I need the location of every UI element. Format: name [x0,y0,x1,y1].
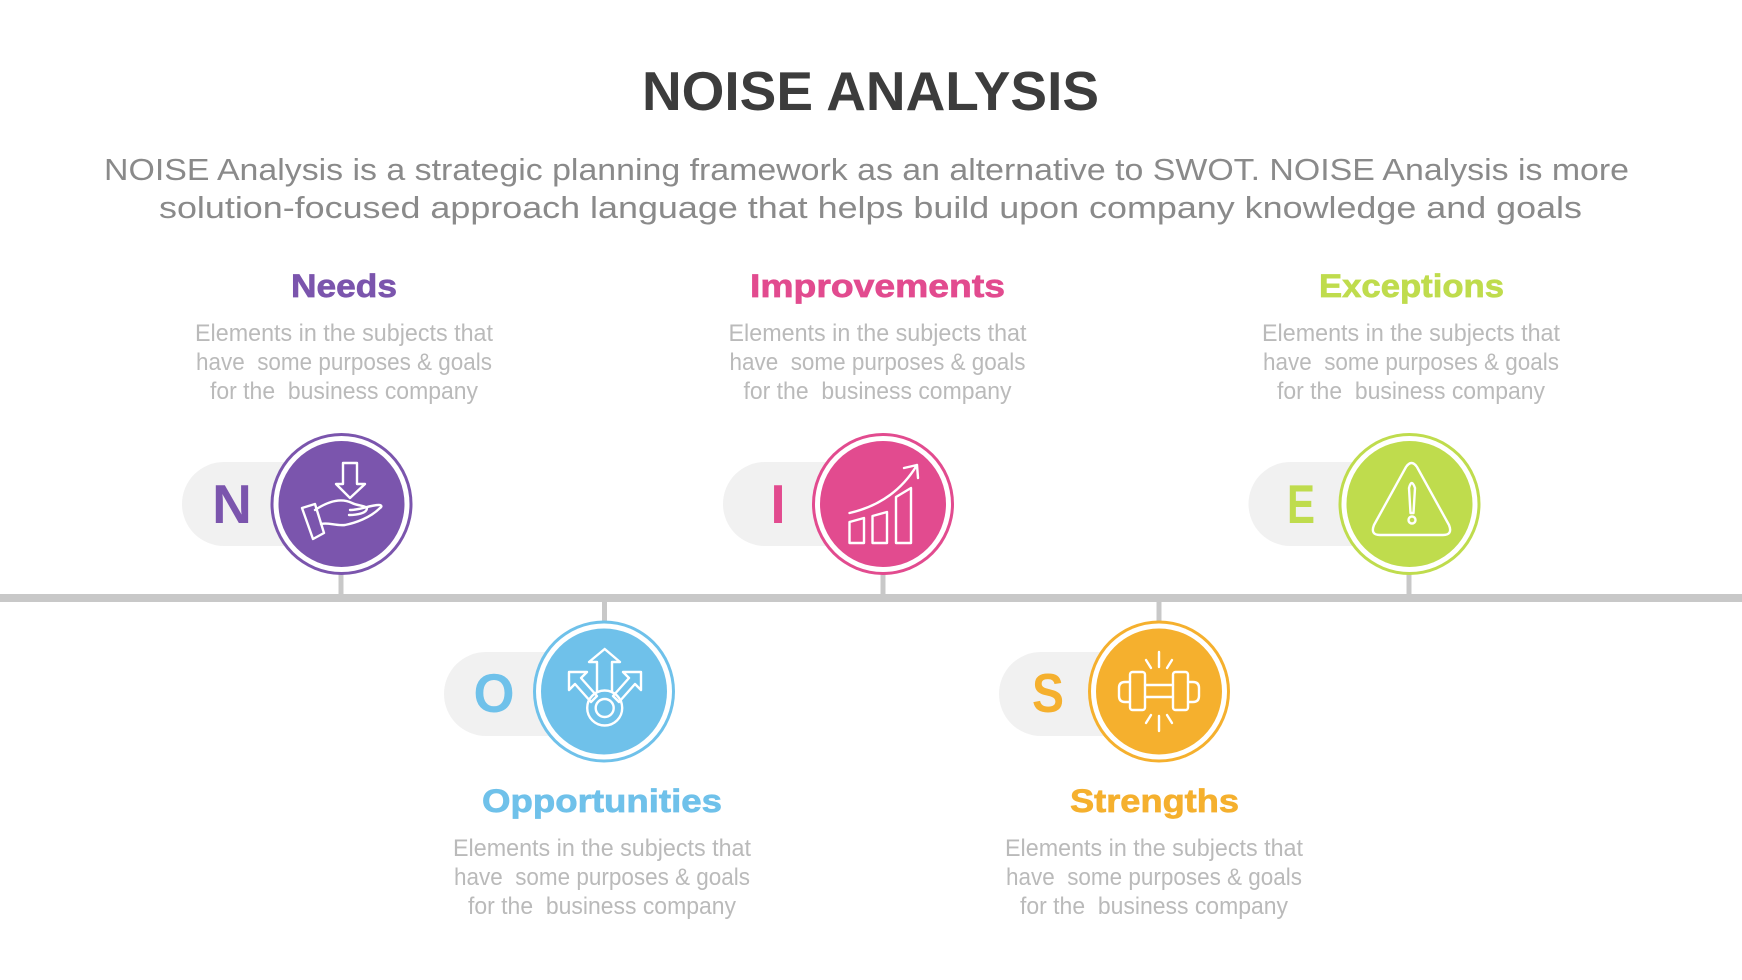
panel: improvements [723,268,1027,575]
text block: opportunities: for the business company [468,893,737,920]
text block: needs [195,320,493,405]
letter pill: O: O [474,662,514,724]
heading: exceptions: Exceptions [1319,268,1504,304]
letter pill: O [444,652,624,736]
text block: exceptions: for the business company [1277,378,1546,405]
text block: strengths: Elements in the subjects that [1005,835,1303,862]
text block: strengths [1005,835,1303,920]
panel: opportunities [444,620,751,920]
icon: diverging arrows [533,620,675,762]
letter pill: I: I [770,473,786,535]
text block: improvements: for the business company [744,378,1012,405]
heading: opportunities: Opportunities [482,783,722,819]
timeline axis [0,572,1742,624]
text block: needs: Elements in the subjects that [195,320,493,347]
title: NOISE ANALYSIS [642,60,1099,122]
letter pill: S: S [1032,662,1064,724]
text block: opportunities [453,835,751,920]
letter pill: S [999,652,1179,736]
text block: opportunities: Elements in the subjects that [453,835,751,862]
heading: improvements: Improvements [750,268,1005,304]
text block: strengths: have some purposes & goals [1006,864,1302,891]
heading: needs: Needs [291,268,397,304]
text block: improvements [728,320,1027,405]
icon: rising bar chart [812,433,954,575]
text block: needs: for the business company [210,378,479,405]
text block: exceptions: have some purposes & goals [1263,349,1559,376]
icon: warning triangle [1338,433,1480,575]
letter pill: N: N [212,473,252,535]
text block: improvements: have some purposes & goals [730,349,1026,376]
text block: improvements: Elements in the subjects that [728,320,1027,347]
subtitle [104,152,1629,225]
text block: needs: have some purposes & goals [196,349,492,376]
subtitle: NOISE Analysis is a strategic planning framework as an alternative to SWOT. NOISE Analysis is more [104,152,1629,187]
heading: strengths: Strengths [1070,783,1239,819]
text block: exceptions: Elements in the subjects that [1262,320,1560,347]
icon: hand receiving arrow [270,433,412,575]
text block: strengths: for the business company [1020,893,1289,920]
letter pill: E [1248,462,1428,546]
subtitle: solution-focused approach language that helps build upon company knowledge and goals [159,190,1582,225]
panel: needs [182,268,493,575]
letter pill: E: E [1287,473,1315,535]
letter pill: N [182,462,362,546]
panel: exceptions [1248,268,1560,575]
letter pill: I [723,462,903,546]
panel: strengths [999,620,1303,920]
text block: opportunities: have some purposes & goals [454,864,750,891]
icon: dumbbell [1088,620,1230,762]
text block: exceptions [1262,320,1560,405]
